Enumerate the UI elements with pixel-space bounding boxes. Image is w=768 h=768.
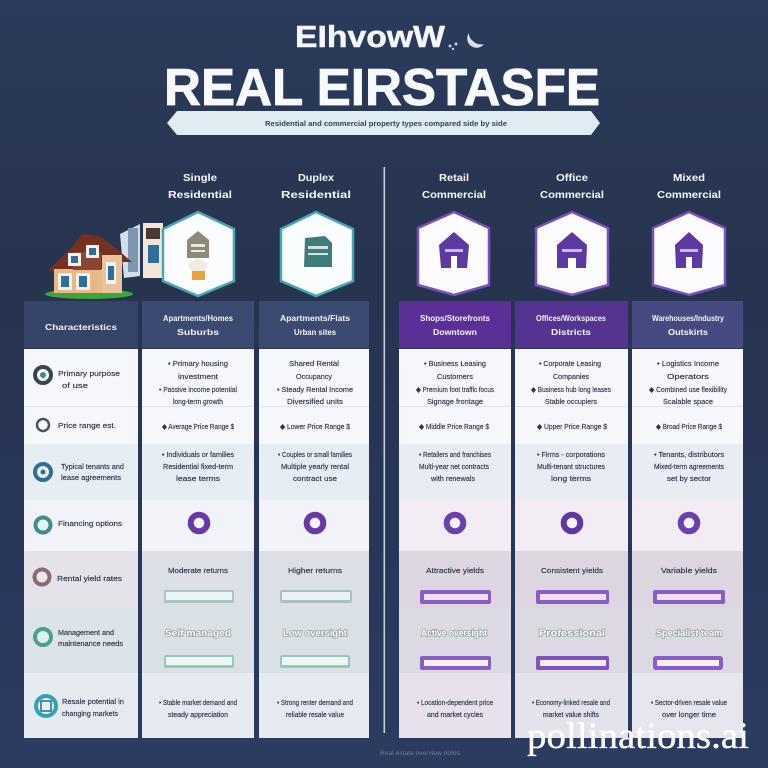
column headings: Mixed bbox=[673, 172, 705, 184]
eyebrow dots bbox=[448, 42, 458, 50]
panel: retail commercial column: Shops/Storefronts bbox=[420, 313, 490, 323]
rating bar bbox=[164, 655, 234, 668]
cell text: Customers bbox=[437, 372, 473, 381]
badge: single residential bbox=[163, 212, 234, 296]
panel: single residential column: Suburbs bbox=[177, 327, 219, 337]
column headings: Commercial bbox=[657, 189, 721, 201]
divider line bbox=[384, 167, 385, 733]
rating bar bbox=[536, 656, 609, 670]
cell text: Operators bbox=[667, 372, 709, 381]
header bbox=[515, 301, 628, 348]
cell text: contract use bbox=[293, 474, 337, 483]
cell text: • Corporate Leasing bbox=[539, 359, 601, 368]
cell text bbox=[649, 359, 727, 483]
badge: mixed commercial bbox=[653, 212, 725, 295]
icon: location bbox=[37, 419, 49, 431]
windows bbox=[58, 245, 116, 290]
cell text: • Firms - corporations bbox=[537, 450, 605, 459]
header bbox=[24, 301, 138, 348]
panel: mixed commercial column: • Sector-driven resale value bbox=[651, 698, 727, 707]
cell text: • Primary housing bbox=[168, 359, 228, 368]
panel: mixed commercial column bbox=[632, 301, 743, 738]
cell text: ◆ Broad Price Range $ bbox=[656, 422, 723, 431]
cell text: ◆ Average Price Range $ bbox=[162, 422, 235, 431]
header bbox=[632, 301, 743, 348]
rating bar bbox=[164, 590, 234, 603]
panel: single residential column: • Stable market demand and bbox=[159, 698, 237, 707]
row labels: changing markets bbox=[62, 709, 118, 718]
cell text: ◆ Upper Price Range $ bbox=[537, 422, 608, 431]
panel: mixed commercial column: Variable yields bbox=[661, 566, 717, 575]
title bbox=[164, 19, 600, 117]
icon: cost bbox=[34, 570, 50, 584]
row labels: Resale potential in bbox=[62, 697, 124, 706]
cell text: • Logistics Income bbox=[657, 359, 719, 368]
cell text: investment bbox=[178, 372, 219, 381]
watermark: pollinations.ai bbox=[527, 716, 749, 757]
panel: duplex residential column bbox=[259, 301, 369, 738]
panel: single residential column: Apartments/Homes bbox=[163, 313, 233, 323]
panel: retail commercial column: Attractive yields bbox=[426, 566, 484, 575]
subtitle banner: Residential and commercial property types compared side by side bbox=[265, 119, 507, 128]
illustration: house bbox=[45, 223, 163, 299]
rating bar bbox=[653, 656, 723, 670]
cell text: Occupancy bbox=[296, 372, 332, 381]
panel: office commercial column: Professional bbox=[539, 628, 605, 639]
cell text: Companies bbox=[553, 372, 589, 381]
badges row bbox=[163, 212, 725, 296]
icon: rating ring bbox=[307, 515, 323, 531]
column headings: Single bbox=[183, 172, 217, 184]
icon: rating ring bbox=[447, 515, 463, 531]
panel: retail commercial column bbox=[399, 301, 511, 738]
panel: office commercial column: • Economy-linked resale and bbox=[532, 698, 610, 707]
panel: duplex residential column: Low oversight bbox=[283, 628, 348, 639]
panel: duplex residential column: • Strong renter demand and bbox=[277, 698, 353, 707]
row labels bbox=[57, 369, 124, 718]
panel: single residential column bbox=[142, 301, 254, 738]
panel: mixed commercial column: Specialist team bbox=[656, 628, 722, 639]
panel: duplex residential column: reliable resale value bbox=[286, 710, 344, 719]
row labels: Primary purpose bbox=[58, 369, 120, 378]
cell text: ◆ Combined use flexibility bbox=[649, 385, 727, 394]
roof bbox=[48, 234, 132, 272]
panel: retail commercial column: and market cycles bbox=[427, 710, 483, 719]
row labels: Rental yield rates bbox=[57, 574, 122, 583]
main heading: REAL EIRSTASFE bbox=[164, 59, 600, 117]
panel: office commercial column: Districts bbox=[551, 327, 591, 337]
column headings: Commercial bbox=[540, 189, 604, 201]
panel: office commercial column: Consistent yields bbox=[541, 566, 603, 575]
column headings: Residential bbox=[168, 189, 232, 201]
icon: ownership bbox=[35, 367, 51, 383]
cell text: long terms bbox=[551, 474, 591, 483]
cell text: • Couples or small families bbox=[278, 450, 352, 459]
panel: mixed commercial column: over longer time bbox=[662, 710, 716, 719]
column headings: Office bbox=[556, 172, 588, 184]
rating bar bbox=[280, 655, 350, 668]
cell text: • Tenants, distributors bbox=[654, 450, 724, 459]
row labels: Financing options bbox=[58, 519, 122, 528]
cell text: Scalable space bbox=[663, 397, 713, 406]
icon: returns bbox=[35, 629, 51, 645]
panel: retail commercial column: • Location-dependent price bbox=[417, 698, 493, 707]
row labels: of use bbox=[62, 381, 88, 390]
subtitle banner bbox=[167, 111, 600, 135]
icon: rating ring bbox=[191, 515, 207, 531]
cell text: Multi-year net contracts bbox=[419, 462, 489, 471]
rating bar bbox=[420, 656, 491, 670]
header bbox=[399, 301, 511, 348]
cell text: Signage frontage bbox=[427, 397, 483, 406]
walls bbox=[54, 269, 116, 293]
cell text: Mixed-term agreements bbox=[654, 462, 724, 471]
panel: retail commercial column: Downtown bbox=[433, 327, 477, 337]
rating bar bbox=[280, 590, 352, 603]
panel: mixed commercial column: Outskirts bbox=[668, 327, 708, 337]
icon: usage bbox=[35, 464, 51, 480]
row labels: Price range est. bbox=[58, 421, 116, 430]
panel: single residential column: Moderate returns bbox=[168, 566, 228, 575]
badge: duplex residential bbox=[281, 212, 353, 296]
header bbox=[142, 301, 254, 348]
rating bar bbox=[653, 590, 725, 604]
footer note: Real estate overview notes bbox=[380, 751, 460, 757]
cell text: ◆ Lower Price Range $ bbox=[280, 422, 351, 431]
cell text: • Passive income potential bbox=[159, 385, 237, 394]
column headings: Retail bbox=[439, 172, 469, 184]
lawn bbox=[45, 289, 133, 299]
eyebrow heading: EIhvowW bbox=[295, 19, 446, 54]
cell text: Multiple yearly rental bbox=[281, 462, 349, 471]
cell text: • Retailers and franchises bbox=[419, 450, 491, 459]
panel: office commercial column: market value shifts bbox=[543, 710, 599, 719]
cell text: • Business Leasing bbox=[424, 359, 486, 368]
panel: retail commercial column: Active oversight bbox=[421, 628, 488, 639]
cell text: ◆ Business hub long leases bbox=[531, 385, 611, 394]
panel: duplex residential column: Higher returns bbox=[288, 566, 342, 575]
icon: rating ring bbox=[681, 515, 697, 531]
cell text bbox=[416, 359, 494, 483]
row labels: Typical tenants and bbox=[61, 462, 124, 471]
cell text: ◆ Middle Price Range $ bbox=[419, 422, 490, 431]
column headings: Commercial bbox=[422, 189, 486, 201]
column headings bbox=[168, 172, 721, 201]
cell text: • Individuals or families bbox=[162, 450, 234, 459]
column headings: Residential bbox=[281, 189, 351, 201]
side building bbox=[120, 223, 163, 278]
header bbox=[259, 301, 369, 348]
cell text bbox=[277, 359, 353, 483]
cell text: Stable occupiers bbox=[545, 397, 597, 406]
icon: size bbox=[36, 518, 50, 532]
panel: duplex residential column: Apartments/Flats bbox=[280, 313, 350, 323]
icon: rating ring bbox=[564, 515, 580, 531]
row labels: Management and bbox=[58, 628, 114, 637]
column headings: Duplex bbox=[298, 172, 334, 184]
panel: duplex residential column: Urban sites bbox=[294, 327, 336, 337]
panel: office commercial column bbox=[515, 301, 628, 738]
icon: management bbox=[36, 696, 56, 716]
row labels: lease agreements bbox=[61, 473, 121, 482]
cell text: lease terms bbox=[176, 474, 220, 483]
cell text: • Steady Rental Income bbox=[277, 385, 353, 394]
cell text bbox=[159, 359, 237, 483]
panel: mixed commercial column: Warehouses/Industry bbox=[652, 313, 724, 323]
panel: single residential column: steady appreciation bbox=[168, 710, 228, 719]
panel: office commercial column: Offices/Workspaces bbox=[536, 313, 606, 323]
cell text: set by sector bbox=[667, 474, 712, 483]
cell text: ◆ Premium foot traffic focus bbox=[416, 385, 494, 394]
cell text: Residential fixed-term bbox=[163, 462, 233, 471]
row labels: maintenance needs bbox=[58, 639, 123, 648]
cell text: with renewals bbox=[430, 474, 475, 483]
eyebrow mark bbox=[467, 33, 484, 48]
cell text: long-term growth bbox=[173, 397, 223, 406]
panel: feature labels column bbox=[24, 301, 138, 738]
rating bar bbox=[420, 590, 491, 604]
cell text bbox=[531, 359, 611, 483]
badge: office commercial bbox=[536, 212, 608, 295]
cell text: Shared Rental bbox=[289, 359, 339, 368]
panel: feature labels column: Characteristics bbox=[45, 322, 117, 332]
panel: single residential column: Self managed bbox=[165, 628, 231, 639]
cell text: Diversified units bbox=[287, 397, 343, 406]
cell text: Multi-tenant structures bbox=[537, 462, 605, 471]
badge: retail commercial bbox=[418, 212, 489, 295]
rating bar bbox=[536, 590, 609, 604]
